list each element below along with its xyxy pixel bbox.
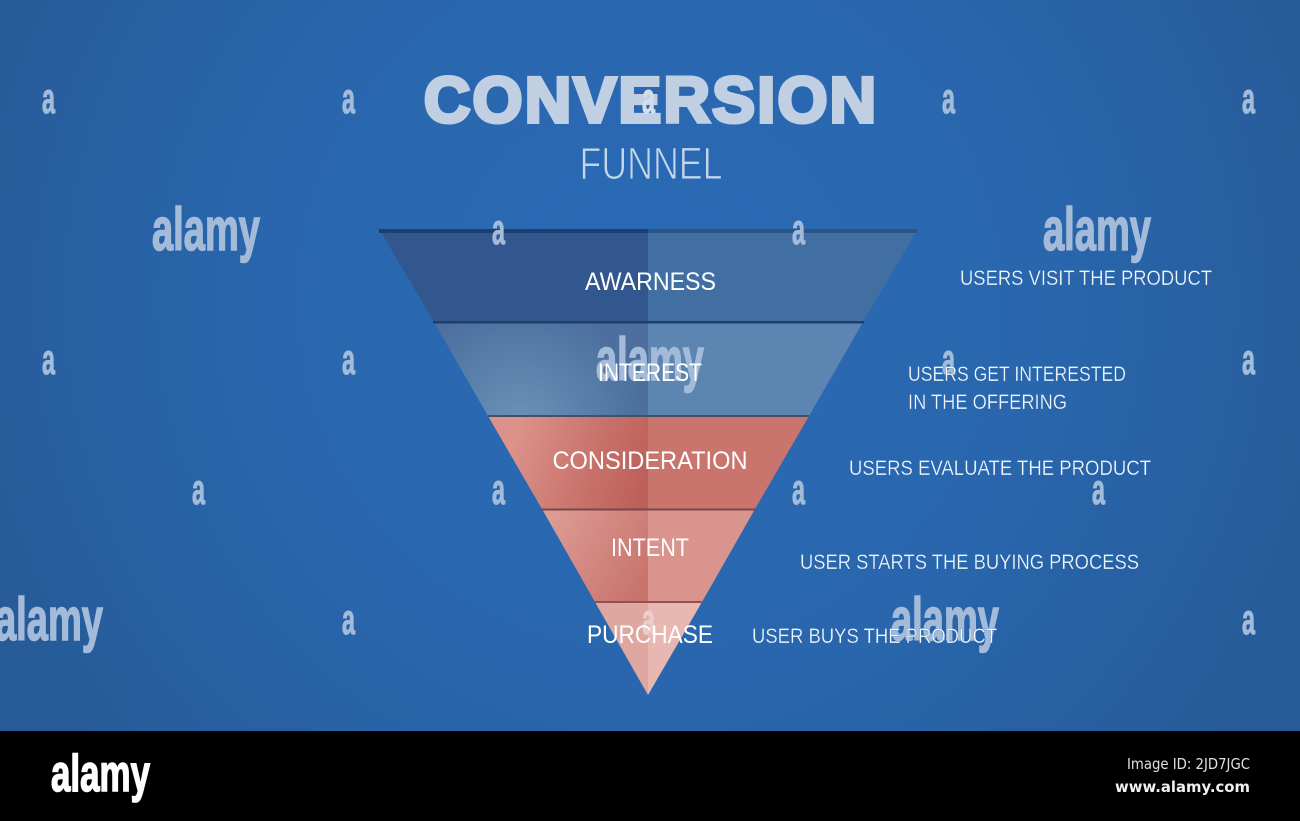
watermark letters: a [342, 336, 356, 384]
watermark logos: alamy [152, 196, 260, 263]
funnel labels: INTEREST [598, 359, 702, 387]
watermark logos: alamy [0, 586, 103, 653]
funnel chart [379, 229, 917, 695]
footer logo: alamy [51, 745, 150, 803]
watermark letters: a [942, 336, 956, 384]
stage descriptions: USERS EVALUATE THE PRODUCT [849, 457, 1151, 480]
watermark letters: a [1092, 466, 1106, 514]
watermark letters: a [792, 466, 806, 514]
stage descriptions: USER STARTS THE BUYING PROCESS [800, 551, 1139, 574]
watermark letters: a [42, 75, 56, 123]
watermark logos [0, 196, 1151, 653]
watermark letters: a [942, 75, 956, 123]
watermark letters: a [492, 206, 506, 254]
stage descriptions: USER BUYS THE PRODUCT [752, 625, 997, 648]
watermark letters: a [642, 75, 656, 123]
funnel labels [552, 268, 748, 649]
watermark letters: a [42, 336, 56, 384]
watermark letters: a [342, 596, 356, 644]
watermark logos: alamy [596, 326, 704, 393]
footer bar [0, 731, 1300, 821]
stage descriptions: USERS VISIT THE PRODUCT [960, 267, 1212, 290]
funnel labels: INTENT [611, 534, 689, 562]
funnel labels: CONSIDERATION [552, 447, 748, 475]
subtitle: funnel: FUNNEL [580, 138, 722, 189]
watermark letters: a [342, 75, 356, 123]
stage descriptions [752, 267, 1212, 648]
funnel labels: PURCHASE [587, 621, 713, 649]
stage descriptions: IN THE OFFERING [908, 391, 1067, 414]
segment: interest [433, 321, 864, 416]
watermark letters: a [1242, 596, 1256, 644]
footer url: www.alamy.com [1115, 778, 1250, 796]
watermark letters: a [642, 596, 656, 644]
stage descriptions: USERS GET INTERESTED [908, 363, 1126, 386]
segment: consideration [488, 415, 809, 509]
segment: awareness [379, 229, 917, 322]
title: conversion: CONVERSION [424, 64, 876, 136]
footer image id: Image ID: 2JD7JGC [1127, 755, 1250, 773]
watermark letters [42, 75, 1256, 644]
watermark letters: a [792, 206, 806, 254]
funnel labels: AWARNESS [585, 268, 716, 296]
watermark letters: a [1242, 75, 1256, 123]
watermark letters: a [192, 466, 206, 514]
watermark letters: a [1242, 336, 1256, 384]
watermark logos: alamy [1043, 196, 1151, 263]
watermark logos: alamy [891, 586, 999, 653]
segment: purchase [595, 601, 702, 695]
segment: intent [541, 508, 756, 602]
watermark letters: a [492, 466, 506, 514]
